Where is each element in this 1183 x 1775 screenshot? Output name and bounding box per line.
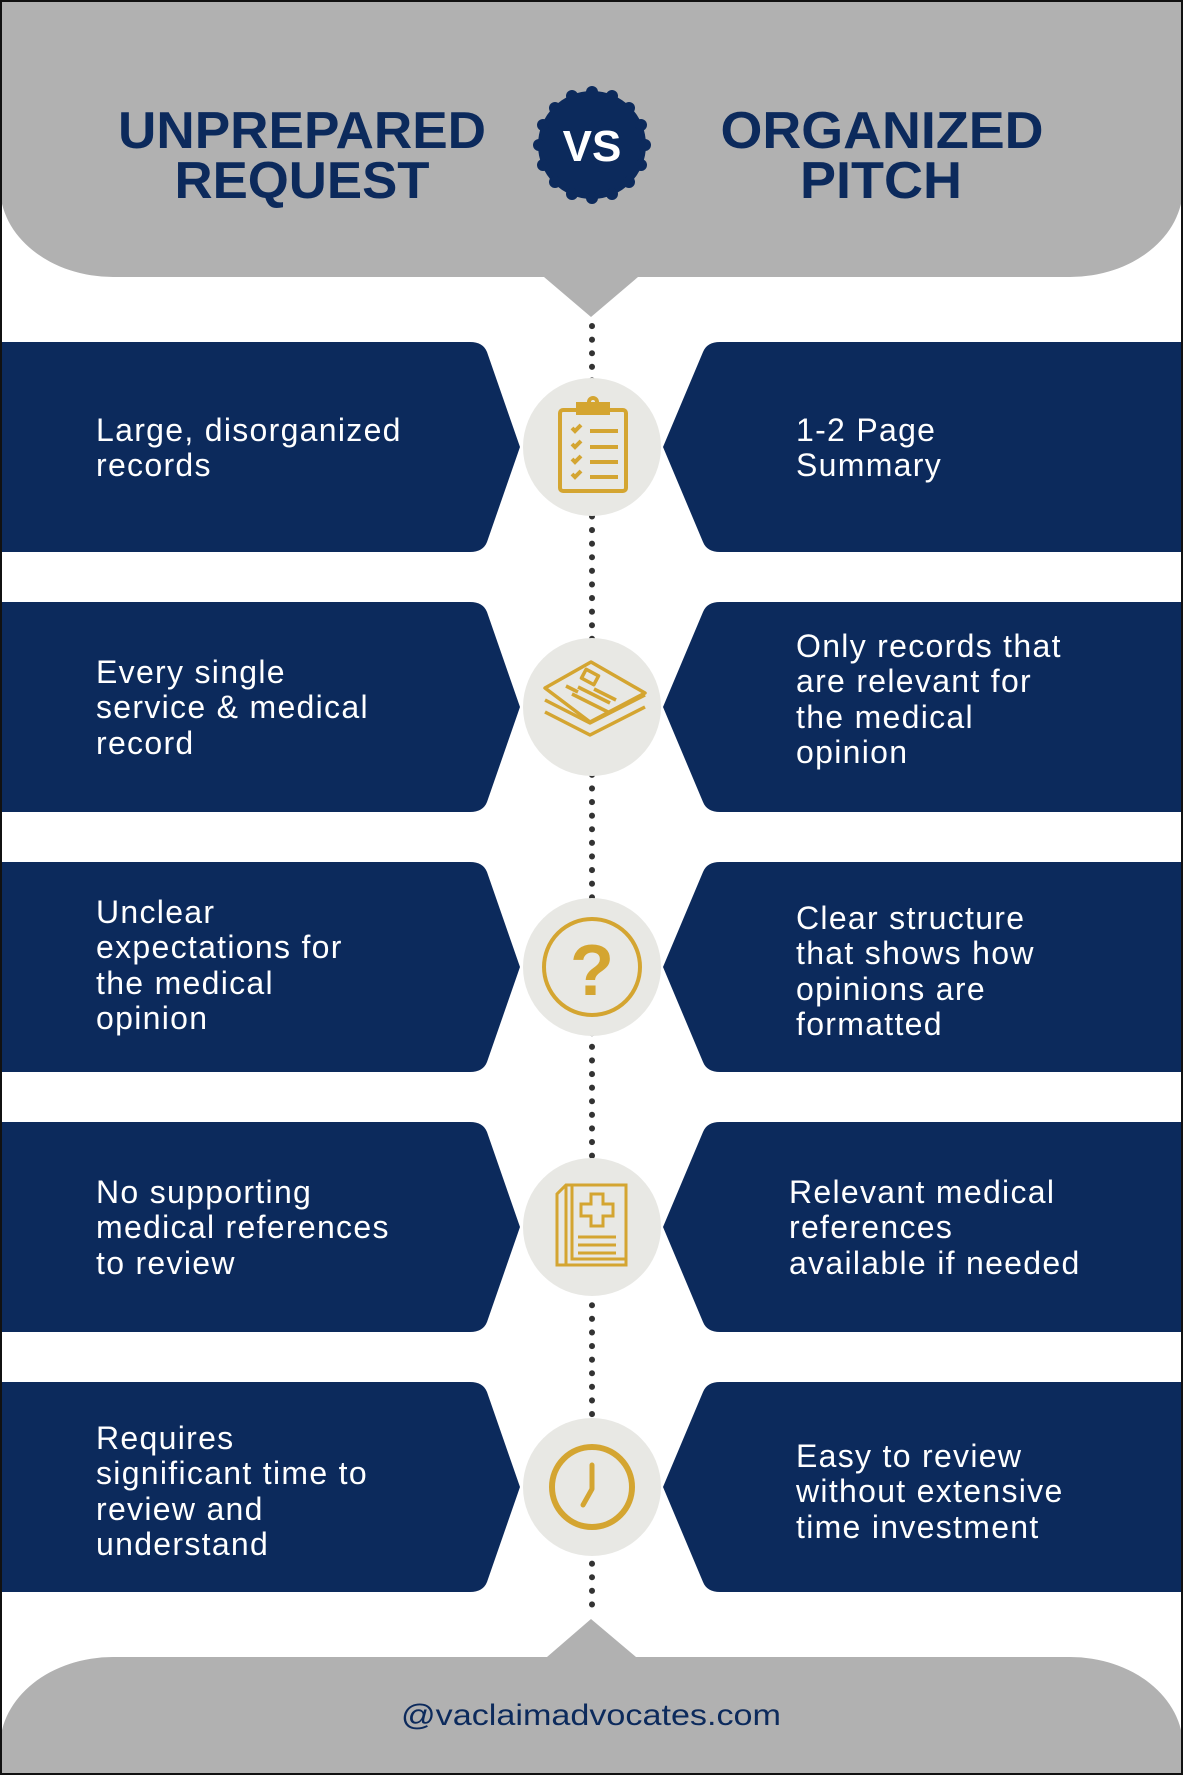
title: unprepared request: REQUEST [174, 152, 430, 210]
left panel: requires time: significant time to [96, 1455, 368, 1491]
vs badge: VS [563, 122, 621, 171]
right panel: easy to review [663, 1382, 1183, 1592]
right panel: relevant references: available if needed [789, 1245, 1081, 1281]
icon: question mark [523, 898, 661, 1036]
right panel: easy to review: without extensive [795, 1473, 1064, 1509]
title: organized pitch: PITCH [800, 152, 962, 210]
header banner [0, 0, 1183, 317]
left panel: unclear expectations: opinion [96, 1000, 208, 1036]
title: unprepared request [118, 102, 486, 210]
left panel: unclear expectations: Unclear [96, 894, 215, 930]
left panel: large records: Large, disorganized [96, 412, 402, 448]
right panel: summary: Summary [796, 447, 942, 483]
right panel: relevant references: Relevant medical [789, 1174, 1055, 1210]
row 3 [0, 862, 1183, 1072]
left panel: no references [0, 1122, 520, 1332]
footer text: @vaclaimadvocates.com [401, 1699, 781, 1732]
title: unprepared request: UNPREPARED [118, 102, 486, 160]
left panel: requires time: review and [96, 1491, 264, 1527]
right panel: easy to review: Easy to review [796, 1438, 1022, 1474]
right panel: clear structure: opinions are [796, 971, 986, 1007]
right panel: clear structure [663, 862, 1183, 1072]
row 4 [0, 1122, 1183, 1332]
left panel: requires time: understand [96, 1526, 269, 1562]
left panel: every record: service & medical [96, 689, 369, 725]
right panel: relevant records: opinion [796, 734, 908, 770]
row 2 [0, 602, 1183, 812]
title: organized pitch [720, 102, 1044, 210]
left panel: requires time [0, 1382, 520, 1592]
right panel: relevant references: references [789, 1209, 953, 1245]
footer banner [0, 1619, 1183, 1775]
right panel: relevant references [663, 1122, 1183, 1332]
vs badge [533, 86, 651, 204]
left panel: every record: Every single [96, 654, 286, 690]
right panel: clear structure: Clear structure [796, 900, 1025, 936]
icon: medical document [523, 1158, 661, 1296]
left panel: every record: record [96, 725, 195, 761]
left panel: no references: medical references [96, 1209, 390, 1245]
row 1 [0, 342, 1183, 552]
right panel: summary [663, 342, 1183, 552]
left panel: unclear expectations [0, 862, 520, 1072]
right panel: clear structure: formatted [796, 1006, 943, 1042]
right panel: easy to review: time investment [796, 1509, 1040, 1545]
right panel: relevant records: are relevant for [796, 663, 1032, 699]
title: organized pitch: ORGANIZED [720, 102, 1044, 160]
row 5 [0, 1382, 1183, 1592]
icon: clipboard [523, 378, 661, 516]
dotted connector line [589, 326, 595, 1612]
icon: question mark: ? [570, 931, 614, 1011]
icon: paper stack [523, 638, 661, 776]
left panel: unclear expectations: the medical [96, 965, 274, 1001]
left panel: no references: No supporting [96, 1174, 312, 1210]
left panel: every record [0, 602, 520, 812]
left panel: large records: records [96, 447, 212, 483]
left panel: unclear expectations: expectations for [96, 929, 343, 965]
right panel: relevant records: Only records that [796, 628, 1062, 664]
left panel: no references: to review [96, 1245, 236, 1281]
right panel: relevant records [663, 602, 1183, 812]
left panel: requires time: Requires [96, 1420, 234, 1456]
right panel: relevant records: the medical [796, 699, 974, 735]
left panel: large records [0, 342, 520, 552]
right panel: clear structure: that shows how [796, 935, 1035, 971]
right panel: summary: 1-2 Page [796, 412, 936, 448]
icon: clock [523, 1418, 661, 1556]
